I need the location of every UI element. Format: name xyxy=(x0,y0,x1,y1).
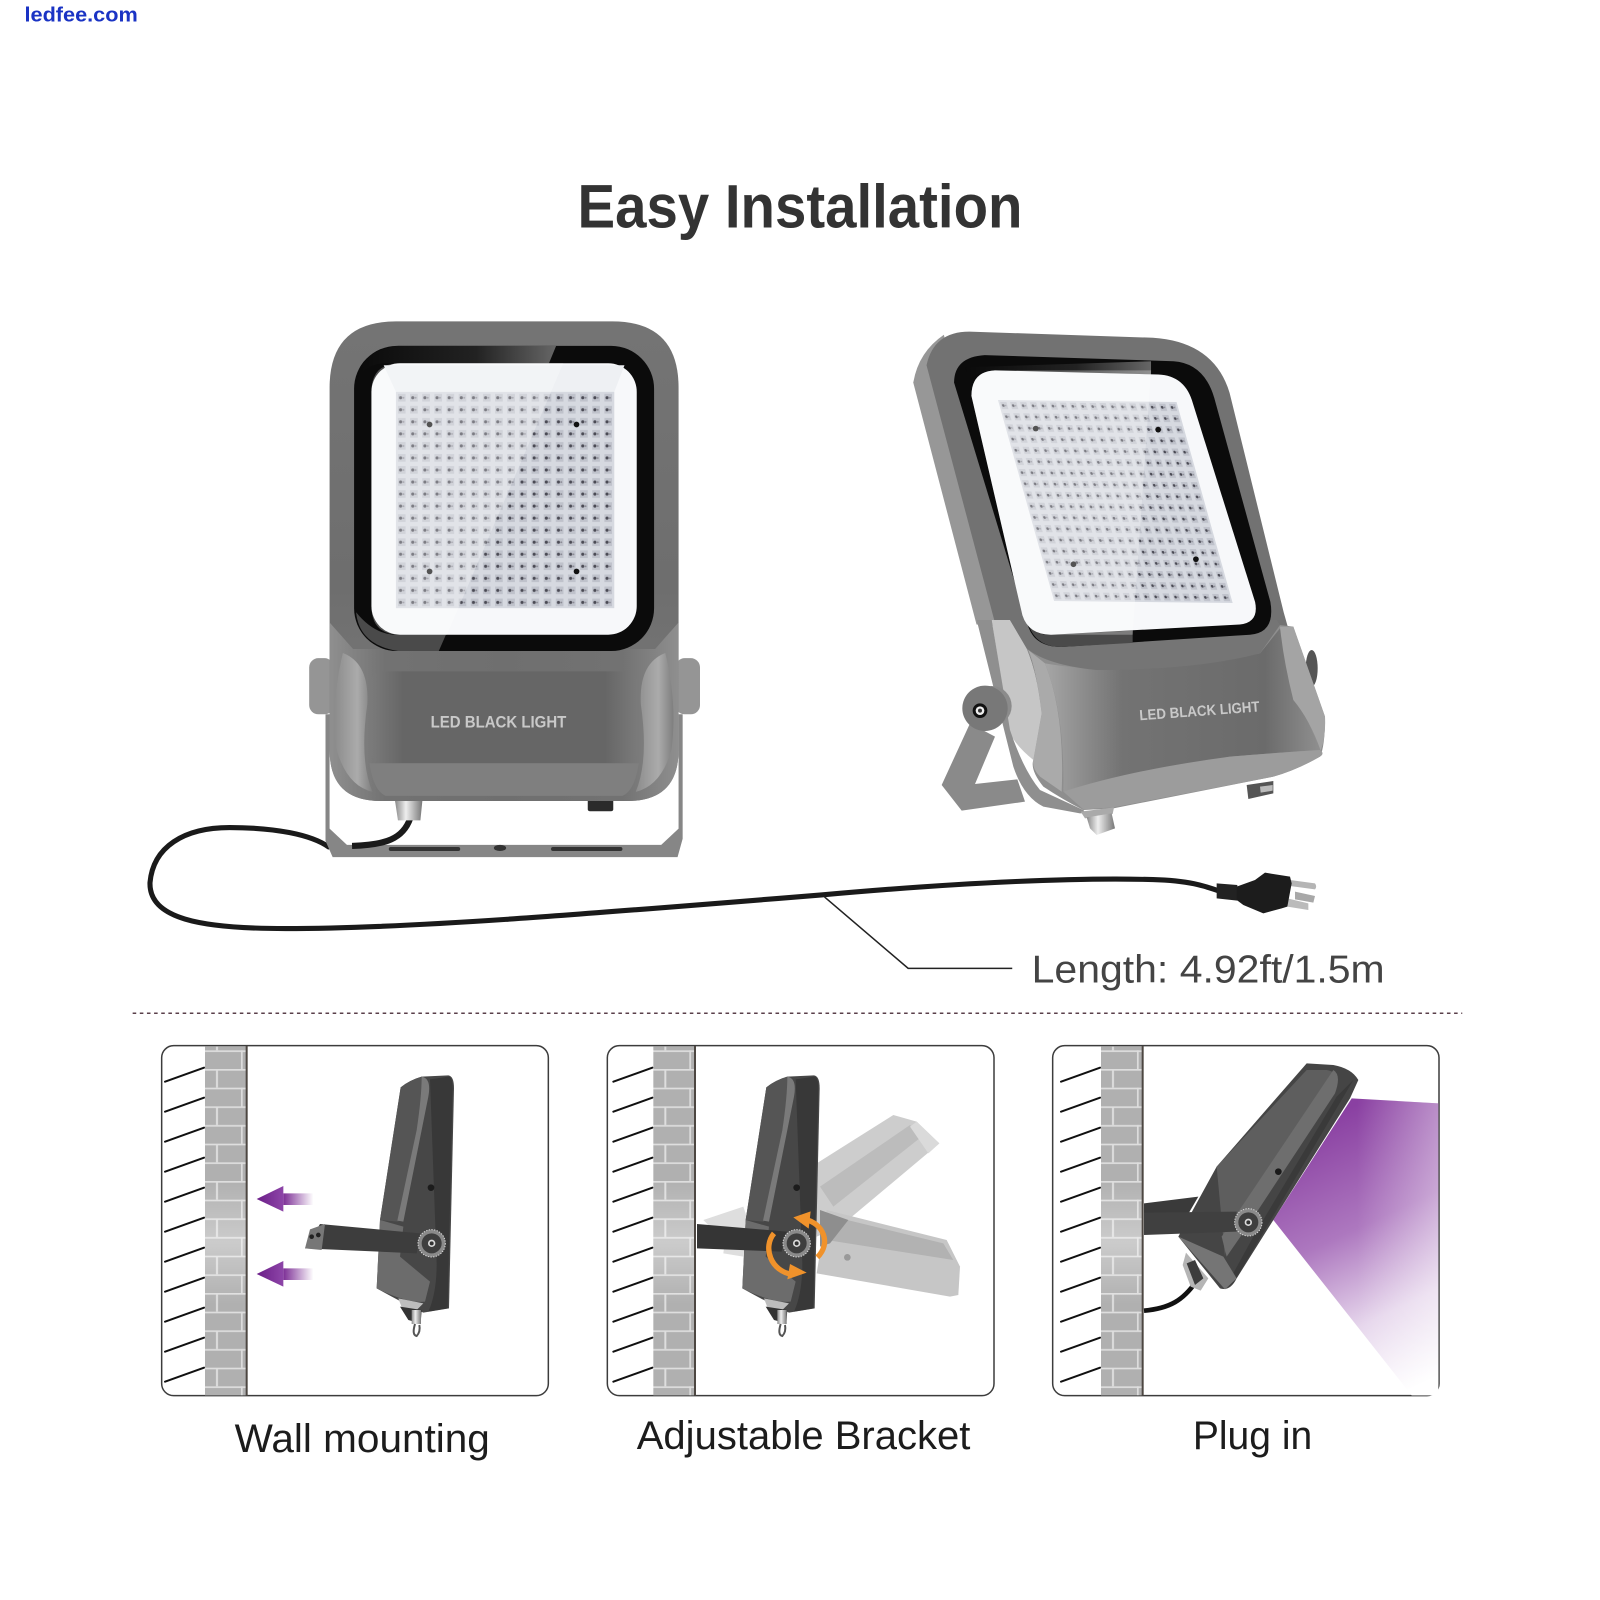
panel: adjustable bracket xyxy=(607,1046,994,1396)
knob xyxy=(962,686,1012,731)
panel: wall mounting xyxy=(162,1046,548,1396)
rim reflection bottom xyxy=(1029,624,1133,647)
inner cable xyxy=(352,818,410,846)
reflector top bevel xyxy=(384,365,624,392)
ghost lamp upper xyxy=(817,1115,939,1237)
arrow heads xyxy=(787,1211,811,1279)
knob xyxy=(783,1230,810,1257)
lower housing xyxy=(330,622,679,801)
power cord xyxy=(150,828,1221,929)
centre plate xyxy=(1045,628,1320,792)
bottom band xyxy=(369,763,639,796)
arm xyxy=(1144,1197,1237,1235)
arrow bottom xyxy=(257,1261,313,1287)
mounting arm xyxy=(305,1224,420,1253)
ghost lamp lower xyxy=(817,1210,960,1297)
wall xyxy=(1061,1046,1144,1396)
rotation arrows xyxy=(769,1219,825,1275)
strap xyxy=(977,620,1084,813)
arrow top xyxy=(257,1186,313,1212)
glass reflection xyxy=(371,363,563,635)
rim reflection bottom xyxy=(356,612,446,651)
wall xyxy=(613,1046,696,1396)
panel frame xyxy=(607,1046,994,1396)
watermark text: ledfee.com xyxy=(24,4,138,26)
black rim xyxy=(354,346,654,651)
rim reflection top xyxy=(356,346,556,383)
white reflector xyxy=(371,363,637,635)
LED board xyxy=(396,392,614,608)
cable gland xyxy=(1081,807,1115,835)
LED board xyxy=(998,400,1233,603)
arm xyxy=(697,1224,787,1252)
mounting screws xyxy=(1033,426,1199,567)
cable xyxy=(1144,1282,1196,1311)
gland xyxy=(1183,1253,1208,1291)
bracket xyxy=(326,714,683,857)
black rim xyxy=(954,355,1271,647)
title: Easy Installation xyxy=(578,173,1022,241)
right strip xyxy=(1280,627,1325,751)
knob xyxy=(418,1230,445,1257)
bottom band xyxy=(1063,750,1323,809)
caption: plug in: Plug in xyxy=(1193,1414,1312,1458)
left bezel xyxy=(1028,650,1062,792)
lamp: angled view xyxy=(913,332,1325,835)
caption: wall mounting: Wall mounting xyxy=(235,1417,490,1461)
left knob xyxy=(309,658,334,714)
right knob xyxy=(1306,650,1318,687)
lamp side view xyxy=(742,1075,820,1336)
housing xyxy=(1027,625,1325,810)
dark centre plate xyxy=(371,671,637,763)
knob xyxy=(1235,1209,1262,1236)
right side highlight xyxy=(636,653,673,792)
lamp side view xyxy=(377,1075,454,1336)
light beam xyxy=(1273,1098,1438,1395)
light side panel xyxy=(992,620,1042,760)
panel frame xyxy=(1053,1046,1439,1396)
lamp tilted xyxy=(1178,1063,1358,1289)
product label: LED BLACK LIGHT xyxy=(1139,699,1260,724)
plug xyxy=(1217,873,1316,913)
side wall xyxy=(913,335,1010,628)
connector xyxy=(1247,781,1273,799)
left side highlight xyxy=(335,653,372,792)
ghost lamp left part xyxy=(703,1207,750,1257)
triangular bracket xyxy=(942,723,1025,811)
frame lower band xyxy=(1010,620,1280,670)
leader line xyxy=(824,897,1012,968)
cable gland xyxy=(395,800,422,820)
connector xyxy=(588,798,613,811)
housing body xyxy=(330,321,679,801)
caption: adjustable bracket: Adjustable Bracket xyxy=(637,1414,970,1458)
bracket slots xyxy=(389,845,622,851)
rim reflection top xyxy=(964,361,1151,380)
panel: plug in xyxy=(1053,1046,1439,1396)
white reflector xyxy=(971,370,1256,635)
cord length label: Length: 4.92ft/1.5m xyxy=(1032,949,1385,992)
lamp: front view xyxy=(309,321,700,857)
product label: LED BLACK LIGHT xyxy=(431,714,566,732)
face frame xyxy=(927,332,1301,684)
panel frame xyxy=(162,1046,548,1396)
wall xyxy=(165,1046,248,1396)
right knob xyxy=(676,658,700,714)
glass reflection xyxy=(971,370,1151,635)
lower assembly xyxy=(942,620,1325,835)
